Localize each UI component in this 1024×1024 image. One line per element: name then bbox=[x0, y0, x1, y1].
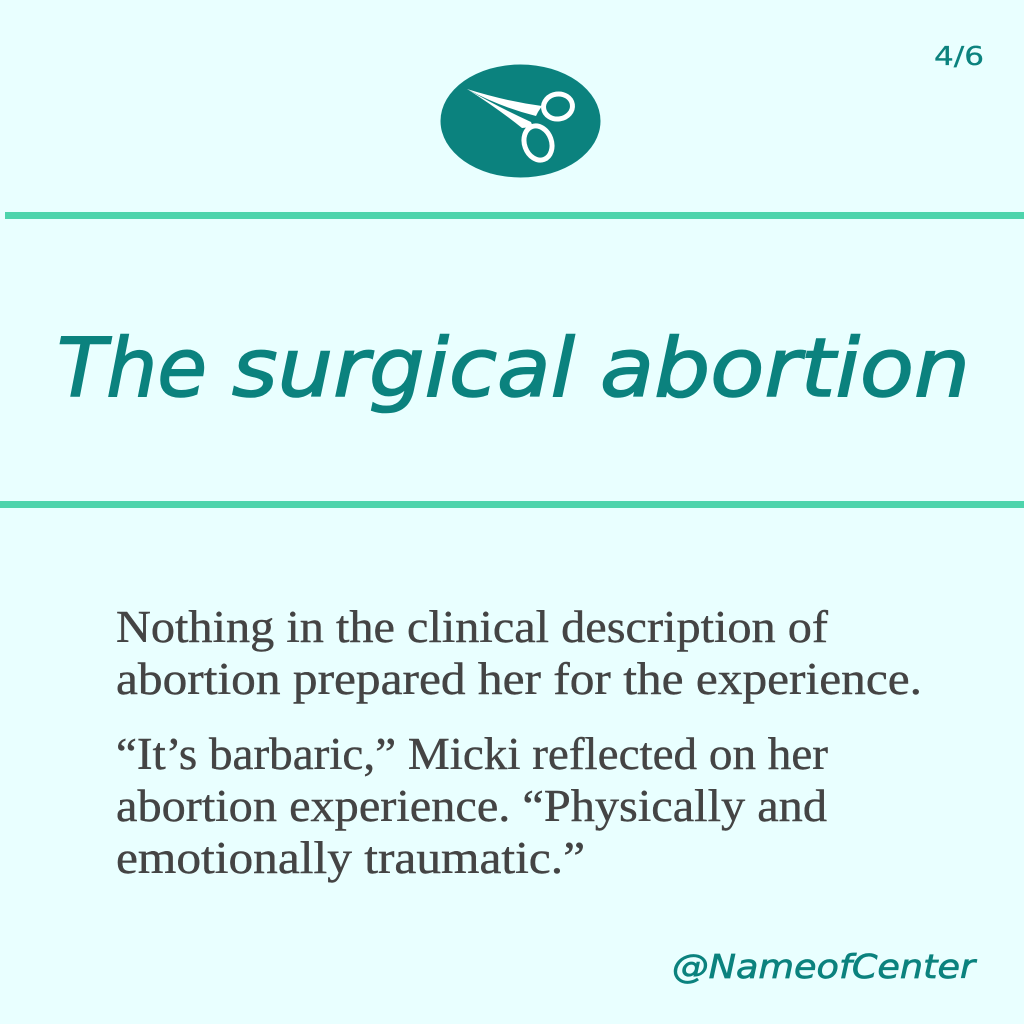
paragraph 1: Nothing in the clinical description of bbox=[116, 602, 828, 652]
paragraph 2: abortion experience. “Physically and bbox=[116, 781, 827, 831]
title: abortion bbox=[600, 322, 970, 416]
title: The bbox=[57, 322, 207, 416]
title: surgical bbox=[232, 322, 576, 416]
paragraph 2: “It’s barbaric,” Micki reflected on her bbox=[116, 729, 828, 779]
top divider bbox=[5, 212, 1024, 219]
paragraph 2: emotionally traumatic.” bbox=[116, 833, 585, 883]
paragraph 1: abortion prepared her for the experience. bbox=[116, 654, 922, 704]
paragraph 2 bbox=[116, 729, 828, 883]
title bbox=[57, 322, 970, 416]
handle: @NameofCenter bbox=[672, 947, 978, 986]
page number: 4/6 bbox=[934, 42, 984, 72]
bottom divider bbox=[0, 501, 1024, 508]
body text bbox=[116, 602, 922, 883]
icon: scissors in oval bbox=[440, 64, 600, 178]
paragraph 1 bbox=[116, 602, 922, 704]
